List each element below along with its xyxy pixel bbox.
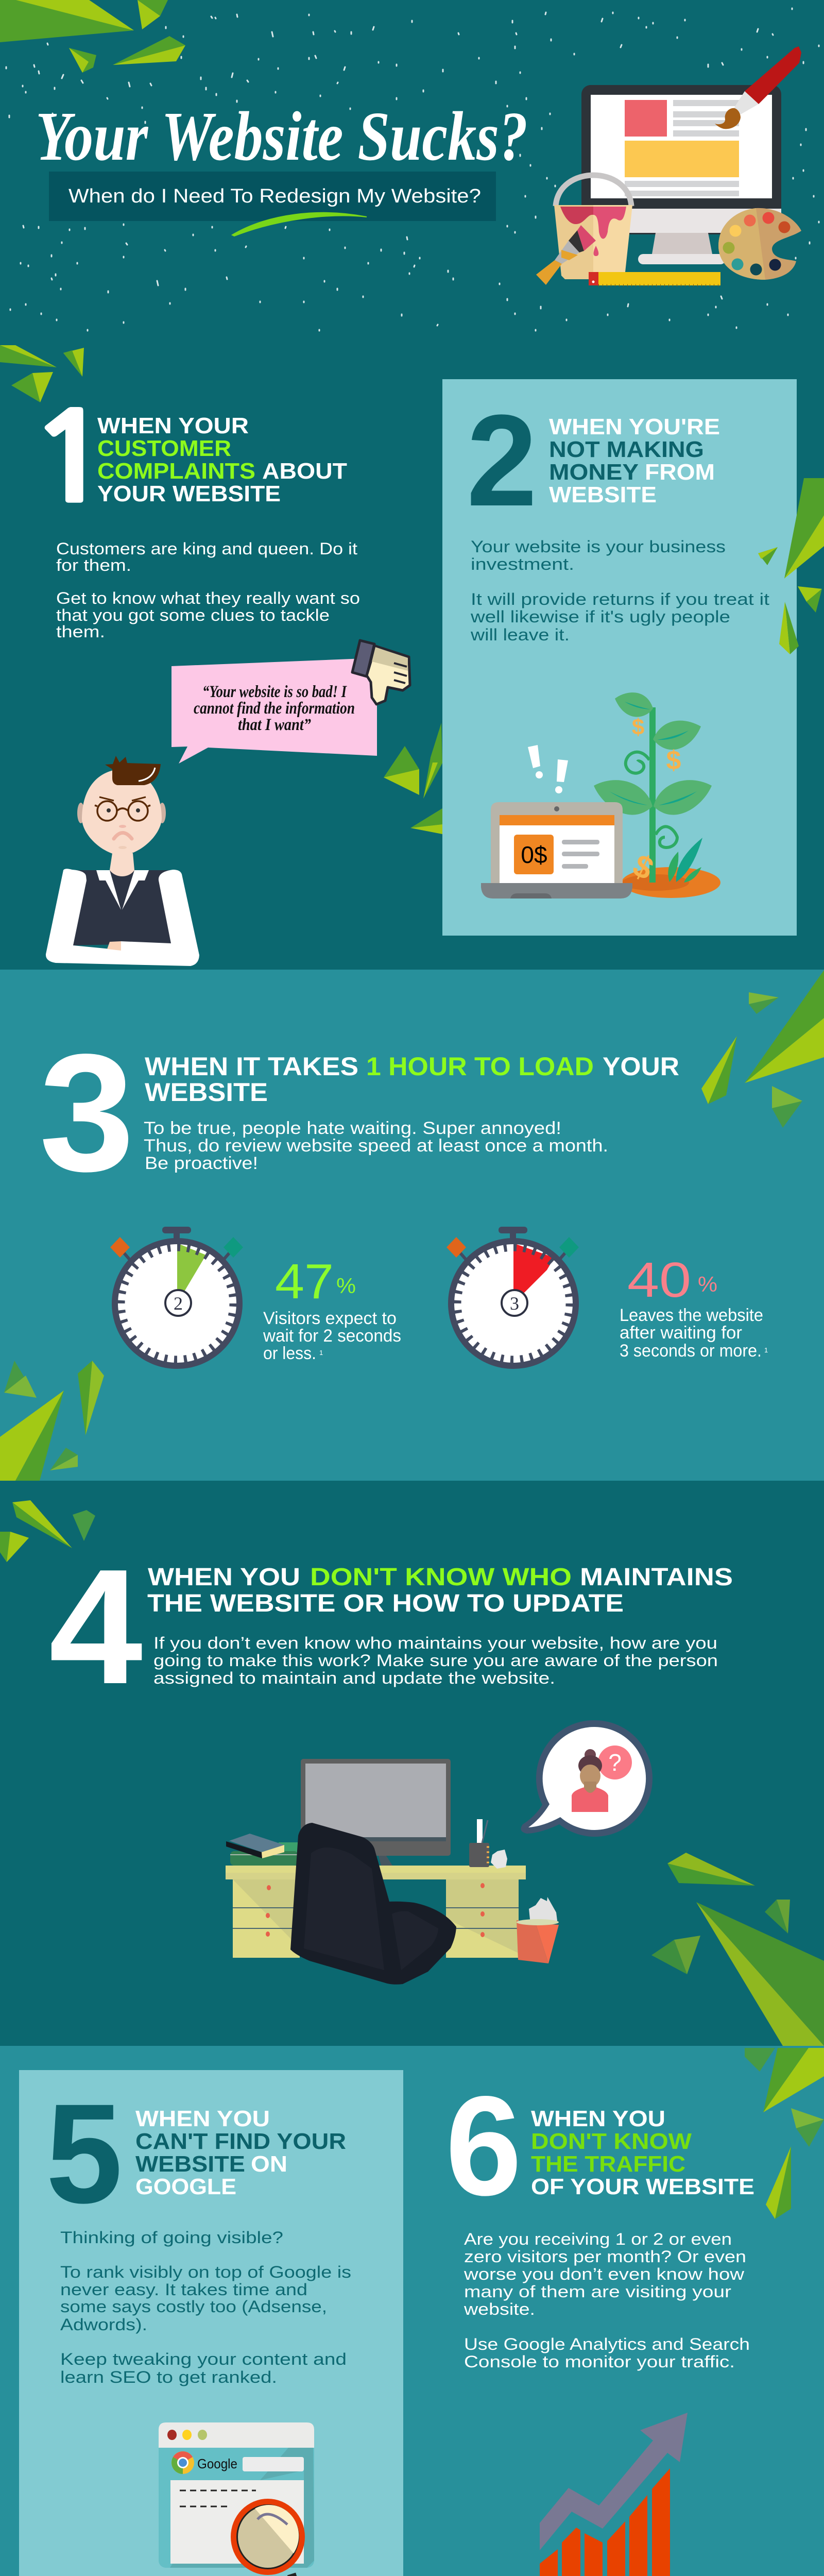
icon: dollar signs: $ [627,848,659,887]
body text: section 1: Customers are king and queen. Do it [56,539,357,558]
shards: section 4 top left [0,1500,95,1562]
icon: chrome logo [171,2451,194,2474]
icon: magnifying glass [231,2499,325,2576]
heading: section 2: WHEN YOU'RE [549,414,720,439]
shards: section 6 right [745,2048,824,2219]
heading: section 3: WHEN IT TAKES [145,1052,358,1081]
body text: section 2 [470,537,769,644]
shards: section 3 left [0,1361,104,1481]
chart: traffic growth arrow and bars [540,2413,688,2576]
heading: section 5: WHEN YOU [135,2106,270,2131]
body text: section 4: assigned to maintain and update the website. [153,1669,555,1687]
title: Your Website Sucks? [36,98,528,175]
body text: section 5: some says costly too (Adsense, [60,2297,327,2316]
speech bubble: complaint [171,658,377,764]
body text: section 6: website. [464,2300,535,2318]
green swoosh [232,213,367,236]
speech bubble: complaint: that I want” [238,716,311,734]
speech bubble: complaint: “Your website is so bad! I [202,683,347,701]
heading: section 2: FROM [645,460,715,485]
speech bubble: who maintains [521,1720,653,1837]
chart: stopwatch 2 seconds [110,1227,243,1366]
body text: section 1: for them. [56,556,131,574]
heading: section 4: WHEN YOU [148,1564,300,1591]
stat: 47 percent: Visitors expect to [263,1309,397,1328]
stat: 40 percent: after waiting for [620,1323,742,1343]
shards: section 4 bottom right [651,1853,824,2046]
body text: section 6: Console to monitor your traffic. [464,2352,735,2371]
header star speckles [6,8,819,331]
number 1: 1 [27,398,115,520]
heading: section 1: COMPLAINTS [97,459,255,484]
stat: 47 percent: % [336,1274,356,1298]
heading: section 5: GOOGLE [135,2174,236,2199]
shards: section 3 right [701,970,824,1128]
illustration: google search window [159,2422,325,2576]
icon: dollar signs [627,715,681,887]
stat: 47 percent: 1 [319,1349,323,1357]
heading: section 3: WEBSITE [145,1078,268,1107]
heading: section 3: YOUR [603,1052,679,1081]
speech bubble: complaint: cannot find the information [194,699,355,718]
heading: section 2: WEBSITE [549,482,657,507]
heading: section 6: DON'T KNOW [531,2129,692,2154]
chart: stopwatch 3 seconds [447,1227,579,1366]
body text: section 1: them. [56,622,105,641]
heading: section 4 [147,1564,733,1617]
body text: section 4 [153,1634,718,1687]
body text: section 6: Use Google Analytics and Search [464,2335,750,2353]
number 3: 3 [39,1019,134,1206]
icon: books [226,1834,299,1866]
body text: section 2: will leave it. [470,625,570,644]
body text: section 5: never easy. It takes time and [60,2280,307,2299]
icon: dollar signs: $ [666,745,681,775]
icon: plant [594,692,712,883]
body text: section 2: investment. [471,555,574,573]
body text: section 5: Keep tweaking your content and [60,2350,347,2368]
heading: section 1: CUSTOMER [97,436,231,461]
shards: around panel 2 [384,478,824,834]
icon: desk [226,1866,526,1958]
heading: section 5 [135,2106,346,2199]
chart: stopwatch 2 seconds: 2 [174,1293,183,1314]
body text: section 6: Are you receiving 1 or 2 or even [464,2230,732,2248]
heading: section 3 [145,1052,679,1107]
body text: section 5: Thinking of going visible? [60,2228,283,2247]
chart: stopwatch 3 seconds: 3 [510,1293,519,1314]
stat: 47 percent: wait for 2 seconds [263,1326,401,1346]
heading: section 2: NOT MAKING [549,437,704,462]
heading: section 1 [97,413,347,506]
heading: section 4: DON'T KNOW WHO [310,1564,572,1591]
body text: section 4: If you don’t even know who maintains your website, how are you [153,1634,717,1652]
stat: 40 percent: 3 seconds or more. [620,1341,762,1361]
panel: section 2 [442,379,797,936]
heading: section 4: MAINTAINS [580,1564,733,1591]
shards: section 1 top left [0,345,84,402]
heading: section 1: WHEN YOUR [97,413,249,438]
illustration: google search window: Google [197,2456,237,2471]
icon: ruler [589,272,720,285]
heading: section 4: THE WEBSITE OR HOW TO UPDATE [147,1590,624,1617]
subtitle banner: When do I Need To Redesign My Website? [68,185,481,207]
body text: section 1: Get to know what they really want so [56,589,360,607]
heading: section 1: ABOUT [262,459,347,484]
stat: 40 percent: 1 [764,1346,768,1354]
body text: section 5: learn SEO to get ranked. [60,2368,277,2386]
illustration: monitor, paint and palette [536,46,801,285]
speech bubble: who maintains: ? [608,1749,622,1776]
body text: section 6: zero visitors per month? Or even [464,2247,746,2266]
heading: section 2 [549,414,720,507]
icon: dollar signs: $ [632,715,644,740]
icon: monitor [301,1759,451,1870]
body text: section 6: many of them are visiting your [464,2282,731,2301]
illustration: money plant and laptop [481,692,720,899]
stat: 40 percent: Leaves the website [620,1306,763,1325]
body text: section 5: Adwords). [60,2315,147,2334]
icon: office chair [290,1823,456,1985]
stat: 47 percent [263,1254,401,1363]
body text: section 6 [464,2230,750,2371]
stat: 47 percent: or less. [263,1344,316,1363]
illustration: empty desk [226,1720,653,1985]
body text: section 3 [144,1118,608,1173]
heading: section 6: THE TRAFFIC [531,2151,685,2177]
number 6: 6 [445,2067,522,2225]
body text: section 2: well likewise if it's ugly people [470,607,730,626]
heading: section 5: WEBSITE [135,2151,245,2177]
icon: paint brush [715,46,801,129]
number 5: 5 [46,2075,123,2233]
stat: 40 percent: % [698,1272,717,1296]
body text: section 3: To be true, people hate waiting. Super annoyed! [144,1118,561,1138]
stat: 40 percent [620,1252,768,1361]
heading: section 2: MONEY [549,460,639,485]
body text: section 3: Thus, do review website speed at least once a month. [144,1136,608,1156]
body text: section 5 [60,2228,351,2386]
body text: section 2: Your website is your business [471,537,726,556]
number 2: 2 [467,387,537,533]
heading: section 3: 1 HOUR TO LOAD [366,1052,594,1081]
body text: section 2: It will provide returns if you treat it [471,590,769,608]
character: angry man [46,756,199,966]
heading: section 5: ON [251,2151,287,2177]
body text: section 1: that you got some clues to tackle [56,606,330,624]
body text: section 1 [56,539,360,641]
body text: section 6: worse you don’t even know how [464,2265,745,2283]
heading: section 5: CAN'T FIND YOUR [135,2129,346,2154]
icon: paint bucket [536,175,632,285]
heading: section 6: OF YOUR WEBSITE [531,2174,754,2199]
icon: colour palette [718,208,801,280]
stat: 40 percent: 40 [627,1252,691,1308]
icon: waste bin [517,1897,559,1963]
number 4: 4 [49,1535,144,1718]
body text: section 4: going to make this work? Make sure you are aware of the person [153,1651,718,1670]
body text: section 3: Be proactive! [145,1154,258,1173]
icon: laptop with 0$ [481,802,632,899]
panel: section 5 [19,2070,403,2576]
subtitle banner [49,172,496,221]
heading: section 6: WHEN YOU [531,2106,665,2131]
icon: thumbs down [352,640,410,704]
heading: section 6 [531,2106,754,2199]
body text: section 5: To rank visibly on top of Google is [60,2263,351,2281]
shards: header [0,0,185,73]
heading: section 1: YOUR WEBSITE [97,481,281,506]
icon: pen cup [469,1819,507,1869]
icon: exclamation marks [528,745,568,793]
stat: 47 percent: 47 [275,1254,334,1309]
icon: laptop with 0$: 0$ [521,841,547,868]
